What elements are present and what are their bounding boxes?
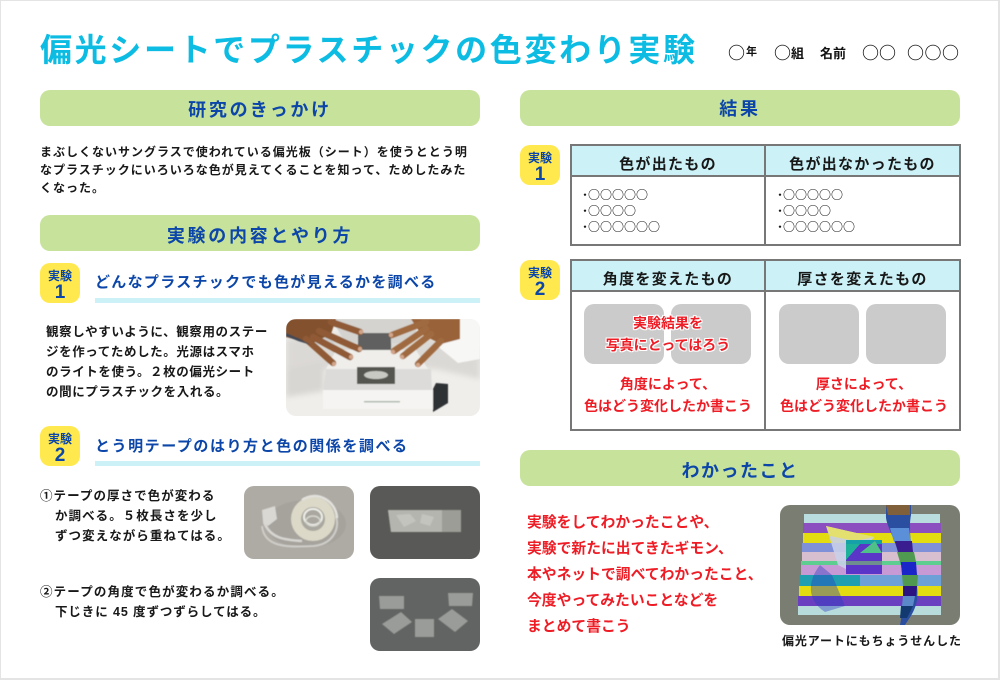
text: tape thickness step: ①テープの厚さで色が変わる	[40, 489, 215, 503]
red note: thickness result	[780, 376, 948, 414]
red note: paste photos: 実験結果を	[633, 315, 703, 331]
badge: experiment 1: 実験	[48, 269, 72, 283]
red note: paste photos	[605, 314, 730, 353]
list: not colored	[777, 186, 855, 235]
photo: tape dispenser	[244, 486, 354, 559]
text: tape thickness step: ずつ変えながら重ねてはる。	[55, 529, 231, 543]
badge: result 1: 実験	[528, 151, 552, 165]
table header: thickness: 厚さを変えたもの	[797, 271, 928, 288]
badge: result 2	[520, 260, 560, 300]
subheading: experiment 1: どんなプラスチックでも色が見えるかを調べる	[95, 274, 437, 291]
table header: colored	[572, 146, 764, 177]
text: experiment 1: 観察しやすいように、観察用のステー	[46, 325, 268, 339]
red note: conclusions: 今度やってみたいことなどを	[527, 593, 718, 609]
name line	[728, 39, 960, 64]
red note: angle result: 角度によって、	[620, 376, 716, 392]
photo placeholder: thickness 2	[866, 304, 946, 364]
photo placeholder: thickness 1	[779, 304, 859, 364]
heading: 結果: 結果	[719, 99, 761, 119]
red note: angle result	[584, 376, 752, 414]
red note: angle result: 色はどう変化したか書こう	[584, 398, 752, 414]
caption: art: 偏光アートにもちょうせんした	[782, 634, 962, 648]
subheading: experiment 2: とう明テープのはり方と色の関係を調べる	[95, 438, 409, 455]
heading: きっかけ	[40, 90, 480, 126]
text: experiment 1: ジを作ってためした。光源はスマホ	[46, 345, 255, 359]
red note: conclusions: 本やネットで調べてわかったこと、	[527, 567, 763, 583]
photo placeholder: angle 2	[671, 304, 751, 364]
heading: 実験の内容	[40, 215, 480, 251]
badge: experiment 1: 1	[55, 282, 65, 303]
badge: experiment 2: 2	[55, 445, 65, 466]
photo: tape pieces at angles	[370, 578, 480, 651]
text: motivation	[40, 145, 468, 195]
list: not colored: ･○○○○○○	[777, 218, 855, 235]
red note: conclusions: 実験をしてわかったことや、	[527, 515, 718, 531]
text: experiment 1	[46, 325, 268, 399]
text: experiment 1: の間にプラスチックを入れる。	[46, 385, 229, 399]
badge: experiment 1	[40, 263, 80, 303]
name line: ○	[728, 39, 745, 64]
badge: experiment 2: 実験	[48, 432, 72, 446]
badge: result 1: 1	[535, 164, 545, 185]
text: tape angle step	[40, 585, 285, 619]
badge: result 2: 実験	[528, 266, 552, 280]
text: motivation: なプラスチックにいろいろな色が見えてくることを知って、ためしたみた	[40, 163, 466, 177]
table: result 1	[570, 144, 961, 246]
name line: ○	[774, 39, 791, 64]
name line: ○○○	[907, 39, 960, 64]
badge: result 2: 2	[535, 279, 545, 300]
heading: きっかけ: 研究のきっかけ	[188, 100, 332, 120]
text: tape thickness step	[40, 489, 231, 543]
badge: result 1	[520, 145, 560, 185]
red note: conclusions: まとめて書こう	[527, 619, 631, 635]
list: not colored: ･○○○○○	[777, 186, 843, 203]
photo: observation stage with hands	[286, 319, 480, 416]
list: colored: ･○○○○○○	[582, 218, 660, 235]
name line: 名前	[820, 46, 846, 61]
table header: thickness	[766, 261, 959, 292]
subheading: experiment 1	[95, 276, 480, 303]
table: result 2	[570, 259, 961, 431]
photo: layered tape on dark sheet	[370, 486, 480, 559]
subheading: experiment 2	[95, 439, 480, 466]
heading: 実験の内容: 実験の内容とやり方	[167, 226, 353, 246]
text: motivation: くなった。	[40, 181, 105, 195]
list: not colored: ･○○○○	[777, 202, 831, 219]
name line: 組	[791, 46, 804, 61]
badge: experiment 2	[40, 426, 80, 466]
table header: not colored	[766, 146, 959, 177]
text: motivation: まぶしくないサングラスで使われている偏光板（シート）を使うととう明	[40, 145, 468, 159]
red note: paste photos: 写真にとってはろう	[606, 337, 730, 353]
text: tape angle step: 下じきに 45 度ずつずらしてはる。	[55, 605, 266, 619]
red note: thickness result: 色はどう変化したか書こう	[780, 398, 948, 414]
title: 偏光シートでプラスチックの色変わり実験	[40, 32, 698, 68]
text: tape thickness step: か調べる。５枚長さを少し	[55, 509, 218, 523]
red note: thickness result: 厚さによって、	[816, 376, 912, 392]
list: colored	[582, 186, 660, 235]
photo: polarized art	[780, 505, 960, 625]
heading: 結果	[520, 90, 960, 126]
text: tape angle step: ②テープの角度で色が変わるか調べる。	[40, 585, 285, 599]
red note: conclusions	[527, 514, 763, 635]
list: colored: ･○○○○	[582, 202, 636, 219]
photo placeholder: angle 1	[584, 304, 664, 364]
table header: angle	[572, 261, 764, 292]
table header: angle: 角度を変えたもの	[603, 271, 733, 288]
table header: colored: 色が出たもの	[619, 156, 717, 173]
name line: ○○	[862, 39, 896, 64]
red note: conclusions: 実験で新たに出てきたギモン、	[527, 541, 733, 557]
heading: わかったこと: わかったこと	[682, 461, 798, 481]
table header: not colored: 色が出なかったもの	[789, 156, 936, 173]
list: colored: ･○○○○○	[582, 186, 648, 203]
heading: わかったこと	[520, 450, 960, 486]
text: experiment 1: のライトを使う。２枚の偏光シート	[46, 365, 255, 379]
name line: 年	[746, 46, 757, 58]
